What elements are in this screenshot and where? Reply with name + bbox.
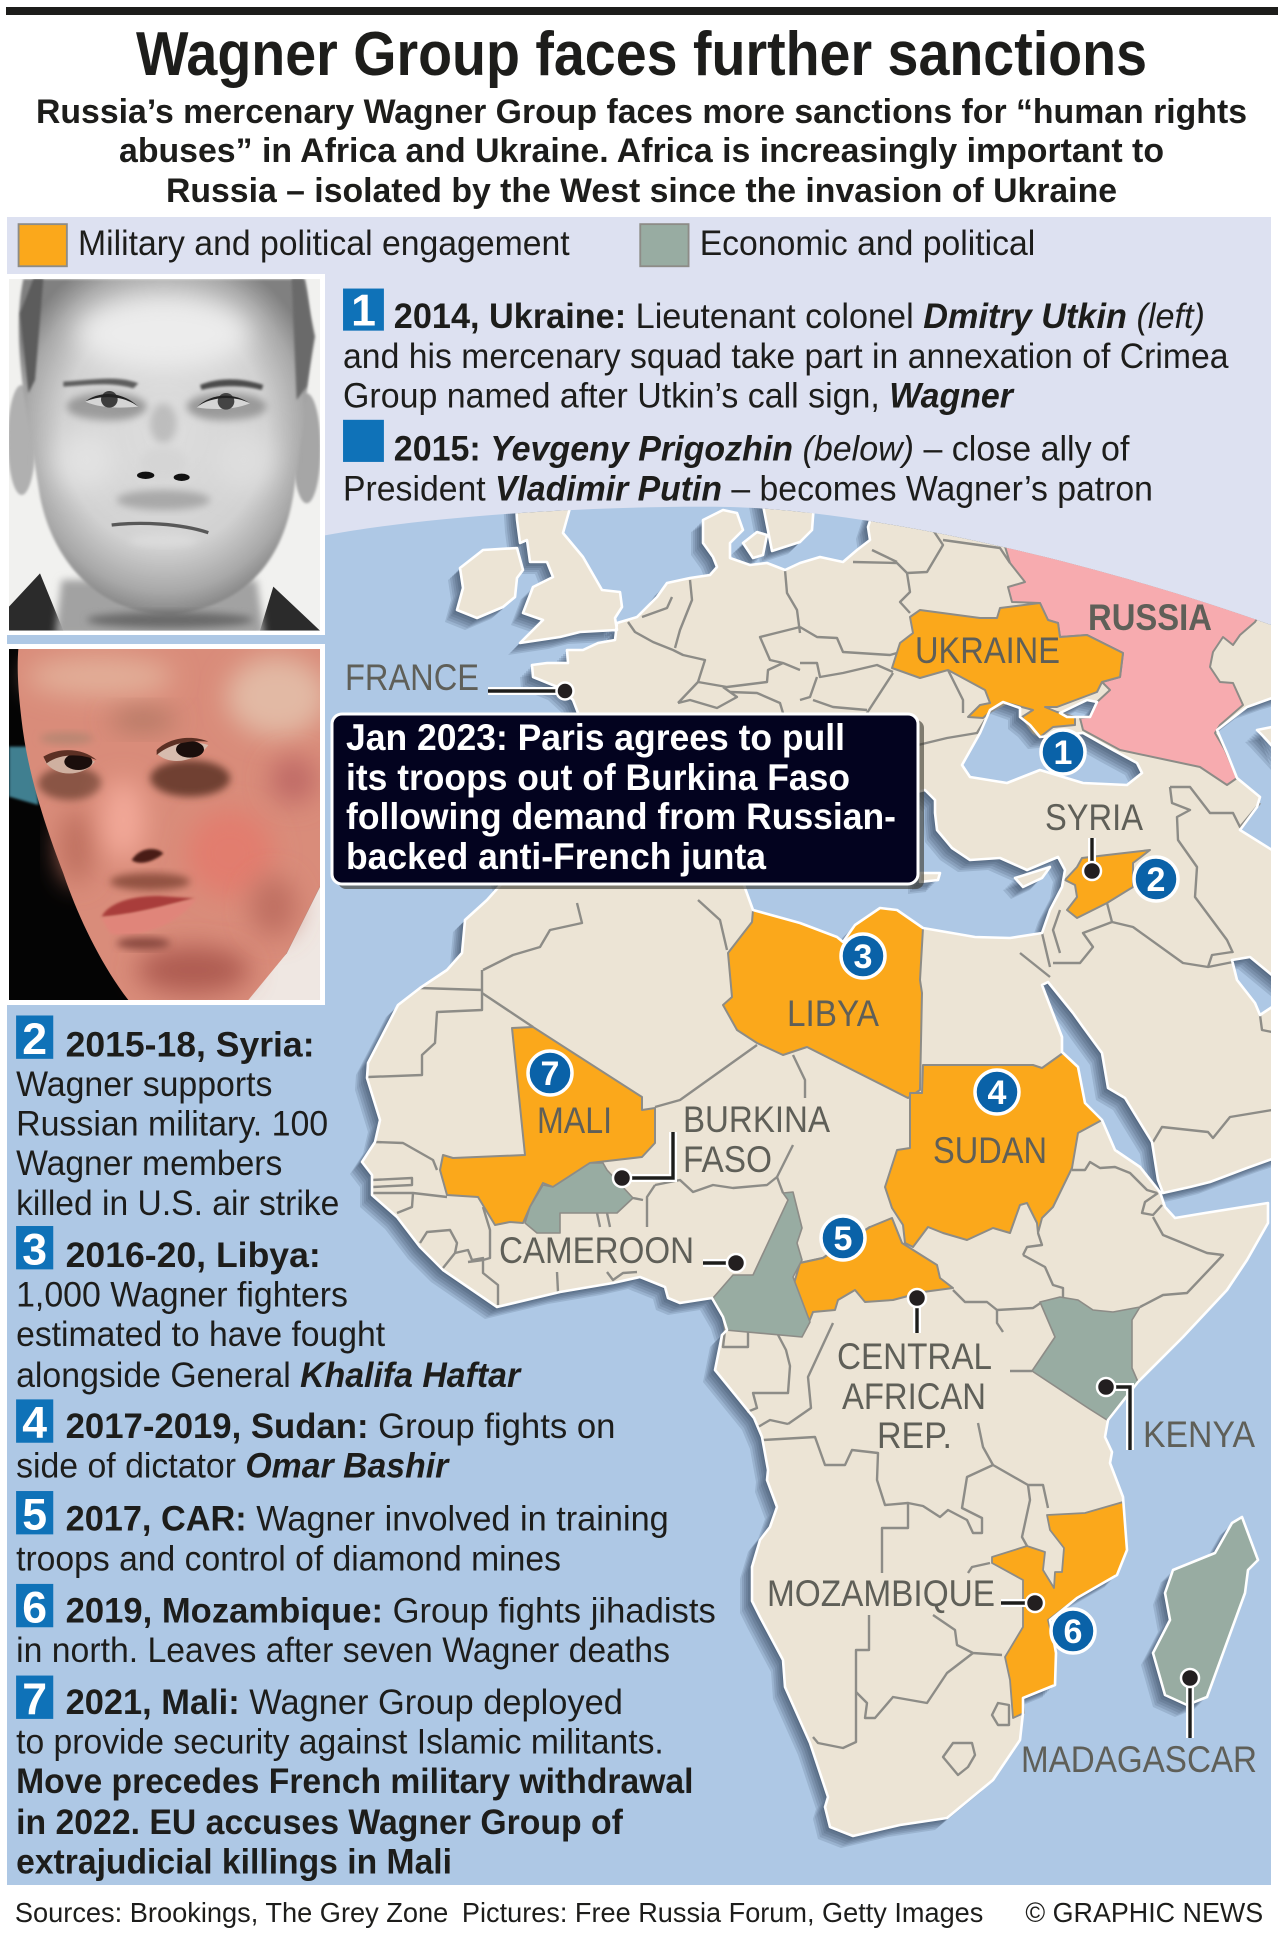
text block: Mali: Move precedes French military withdrawal	[16, 1761, 694, 1801]
text block: Mali: extrajudicial killings in Mali	[16, 1842, 452, 1882]
eye sockets and bags	[38, 767, 102, 800]
land shadow	[350, 492, 1278, 1848]
text block: Sudan	[16, 1399, 615, 1485]
country labels: MALI	[537, 1100, 612, 1141]
text block: Syria: Wagner members	[16, 1143, 282, 1183]
footer credits: Sources: Brookings, The Grey Zone	[15, 1897, 448, 1928]
text block: Syria: 2015-18, Syria:	[66, 1024, 315, 1064]
text block: 2015 Prigozhin: President Vladimir Putin – becomes Wagner’s patron	[343, 468, 1153, 508]
country labels	[345, 597, 1257, 1780]
cheeks	[50, 436, 108, 487]
teal background patch	[9, 747, 38, 805]
leader dots	[556, 682, 1199, 1687]
country labels: MOZAMBIQUE	[767, 1573, 995, 1614]
subtitle: Russia – isolated by the West since the invasion of Ukraine	[166, 172, 1117, 210]
text block: Mozambique	[16, 1583, 716, 1670]
country labels: BURKINA	[683, 1099, 830, 1140]
legend swatch: economic and political	[640, 224, 689, 266]
country labels: CAMEROON	[499, 1230, 694, 1271]
numbered map markers: 5	[834, 1220, 852, 1258]
chin shadow	[87, 612, 253, 628]
country labels: REP.	[877, 1415, 952, 1456]
coastline	[362, 490, 1278, 1836]
photo: Yevgeny Prigozhin	[7, 644, 327, 1005]
text block: Libya: estimated to have fought	[16, 1314, 385, 1354]
hair	[20, 279, 43, 393]
text block: CAR: 2017, CAR: Wagner involved in training	[66, 1499, 669, 1539]
country: Sudan	[885, 1053, 1102, 1247]
nose	[102, 780, 145, 860]
callout: Paris withdrawal: its troops out of Burkina Faso	[346, 757, 850, 798]
numbered map markers: 2	[1147, 861, 1165, 899]
text block: Mali: 7	[22, 1675, 47, 1724]
map	[7, 490, 1278, 1885]
eyes	[85, 394, 138, 408]
eye sockets	[67, 393, 147, 421]
ocean	[7, 507, 1271, 1885]
collar	[9, 573, 320, 631]
nostrils	[137, 472, 154, 479]
country: Burkina Faso	[525, 1163, 633, 1233]
text block: Mali	[16, 1675, 694, 1882]
country: Madagascar	[1153, 1517, 1258, 1705]
numbered map markers: 6	[1064, 1613, 1082, 1651]
brows	[63, 379, 138, 388]
subtitle: Russia’s mercenary Wagner Group faces more sanctions for “human rights	[36, 93, 1247, 131]
text block: Mali: in 2022. EU accuses Wagner Group of	[16, 1802, 623, 1842]
face	[18, 649, 320, 1000]
text block: Mali: to provide security against Islamic militants.	[16, 1722, 664, 1762]
legend	[19, 223, 1035, 266]
country labels: MADAGASCAR	[1021, 1739, 1257, 1780]
text block: 2014 Ukraine: and his mercenary squad take part in annexation of Crimea	[343, 336, 1229, 376]
country: Mali	[440, 1027, 655, 1225]
callout: Paris withdrawal: Jan 2023: Paris agrees to pull	[346, 717, 845, 758]
mouth	[102, 896, 195, 917]
text block: Sudan: 2017-2019, Sudan: Group fights on	[66, 1406, 615, 1446]
country: Ukraine	[892, 603, 1123, 737]
country: Kenya	[1032, 1297, 1140, 1420]
callout: Paris withdrawal: backed anti-French junta	[346, 836, 766, 877]
leader lines	[488, 691, 1190, 1738]
country: Libya	[723, 908, 923, 1098]
callout: Paris withdrawal	[332, 714, 924, 889]
country labels: FRANCE	[345, 657, 479, 698]
footer credits: Pictures: Free Russia Forum, Getty Images	[462, 1897, 983, 1928]
text block: Sudan: 4	[22, 1399, 47, 1448]
text block: Syria: Wagner supports	[16, 1064, 272, 1104]
top rule	[6, 7, 1278, 15]
country labels: LIBYA	[787, 993, 879, 1034]
text block: CAR: troops and control of diamond mines	[16, 1538, 561, 1578]
text block: Syria: killed in U.S. air strike	[16, 1183, 339, 1223]
ears	[8, 385, 36, 495]
text block: Mozambique: 2019, Mozambique: Group fights jihadists	[66, 1590, 716, 1630]
legend: Military and political engagement	[78, 223, 570, 263]
text block: CAR	[16, 1490, 669, 1578]
footer credits: © GRAPHIC NEWS	[1025, 1897, 1263, 1928]
text block: Mozambique: in north. Leaves after seven Wagner deaths	[16, 1630, 670, 1670]
land masses and country shapes	[350, 490, 1278, 1848]
country labels: SYRIA	[1045, 797, 1143, 838]
subtitle: abuses” in Africa and Ukraine. Africa is increasingly important to	[119, 132, 1164, 170]
country labels: UKRAINE	[915, 630, 1060, 671]
country: Syria	[1065, 850, 1150, 918]
text block: Libya: 2016-20, Libya:	[66, 1235, 321, 1275]
country labels: SUDAN	[933, 1130, 1047, 1171]
country: Central African Republic	[793, 1218, 953, 1327]
numbered map markers: 1	[1054, 734, 1072, 772]
country: Russia	[1004, 547, 1258, 786]
neck	[55, 580, 265, 637]
text block: Syria: Russian military. 100	[16, 1104, 328, 1144]
shirt collar	[243, 887, 320, 1000]
footer credits	[15, 1897, 1263, 1928]
subtitle	[36, 93, 1247, 210]
text block: 2015 Prigozhin	[343, 420, 1153, 508]
text block: 2014 Ukraine: 2014, Ukraine: Lieutenant colonel Dmitry Utkin (left)	[394, 296, 1205, 336]
text block: Libya: 3	[22, 1225, 47, 1274]
country labels: CENTRAL	[837, 1336, 992, 1377]
text block: Mozambique: 6	[22, 1583, 47, 1632]
text block: Syria: 2	[22, 1015, 47, 1064]
text block: Libya: alongside General Khalifa Haftar	[16, 1355, 522, 1395]
country: Cameroon	[713, 1192, 810, 1337]
photo: Dmitry Utkin	[7, 274, 325, 637]
mouth	[112, 523, 208, 533]
country labels: KENYA	[1143, 1414, 1255, 1455]
legend: Economic and political	[700, 223, 1035, 263]
text block: Sudan: side of dictator Omar Bashir	[16, 1445, 450, 1485]
country labels: AFRICAN	[842, 1376, 986, 1417]
text block: Libya: 1,000 Wagner fighters	[16, 1275, 348, 1315]
country labels: FASO	[683, 1139, 772, 1180]
title: Wagner Group faces further sanctions	[136, 20, 1147, 89]
text block: 2014 Ukraine	[343, 287, 1229, 415]
text block: Syria	[16, 1015, 339, 1223]
text block: Libya	[16, 1225, 522, 1395]
callout: Paris withdrawal: following demand from Russian-	[346, 796, 896, 837]
country labels: RUSSIA	[1088, 597, 1212, 638]
head	[19, 279, 310, 615]
country: Mozambique	[992, 1502, 1127, 1718]
numbered map markers: 3	[854, 938, 872, 976]
text block: CAR: 5	[22, 1490, 47, 1539]
text block: Mali: 2021, Mali: Wagner Group deployed	[66, 1682, 623, 1722]
legend swatch: military and political	[19, 224, 67, 266]
text block: 2014 Ukraine: 1	[351, 287, 376, 336]
text block: 2014 Ukraine: Group named after Utkin’s call sign, Wagner	[343, 375, 1015, 415]
numbered map markers: 7	[541, 1055, 559, 1093]
eyes	[45, 755, 95, 774]
numbered map markers: 4	[988, 1074, 1007, 1112]
country borders	[368, 530, 1272, 1775]
text block: 2015 Prigozhin: 2015: Yevgeny Prigozhin (below) – close ally of	[394, 429, 1130, 469]
numbered map markers	[528, 730, 1178, 1653]
